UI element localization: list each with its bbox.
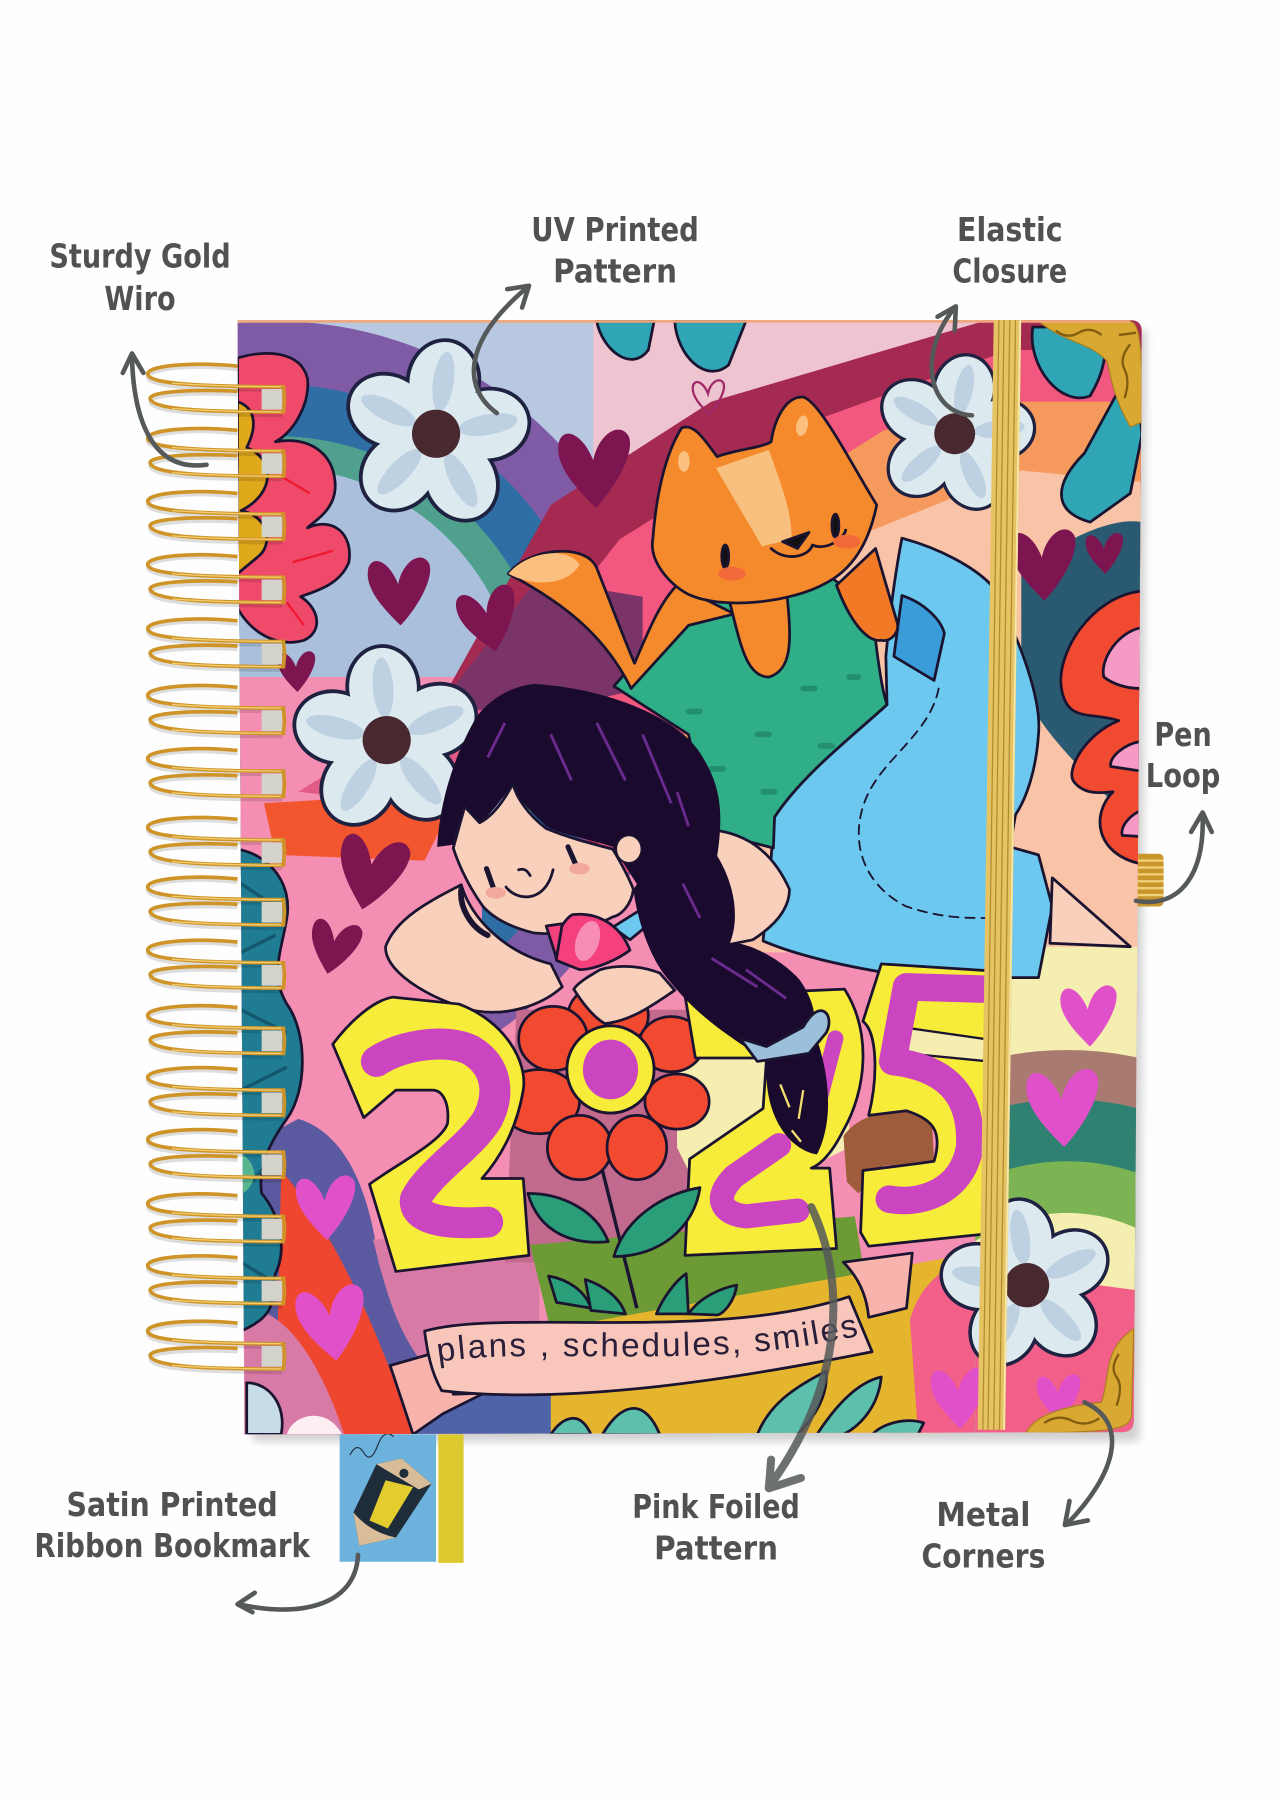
arrow: pen loop: [1136, 812, 1212, 902]
second numeral 2: [685, 989, 863, 1255]
banner: [388, 1252, 914, 1434]
label: Elastic Closure: Closure: [952, 251, 1067, 290]
elastic closure: [978, 320, 1021, 1430]
girl's face: [453, 784, 641, 935]
gold wire spiral: [148, 364, 285, 1372]
teal bottom leaves: [551, 1371, 924, 1434]
metal corner bottom right: [1026, 1329, 1134, 1433]
red flower as zero: [499, 983, 709, 1308]
right red flower: [1061, 591, 1142, 864]
girl's braid: [633, 855, 828, 1154]
flower 3: [880, 353, 1036, 511]
girl's hand: [574, 966, 675, 1024]
girl's front arm: [386, 885, 562, 1012]
right edge painted splash: [1021, 521, 1142, 826]
top right teal leaves: [597, 321, 1142, 522]
label: Sturdy Gold Wiro: Sturdy Gold: [49, 236, 231, 275]
flower leaves: [528, 1188, 737, 1315]
label: Elastic Closure: [952, 210, 1067, 290]
planner cover: [238, 320, 1142, 1434]
numeral 5: [861, 964, 989, 1246]
label: UV Printed Pattern: Pattern: [553, 251, 677, 290]
flower 4: [939, 1197, 1110, 1366]
label: Metal Corners: Metal: [936, 1495, 1030, 1534]
flower 2: [292, 644, 478, 827]
foot: [1050, 878, 1130, 947]
label: Pen Loop: Pen: [1154, 715, 1212, 754]
arrow: elastic closure: [932, 306, 972, 415]
arrow: sturdy gold wiro: [123, 353, 207, 465]
label: Metal Corners: [921, 1495, 1045, 1575]
label: Metal Corners: Corners: [921, 1536, 1045, 1575]
shoulder strap: [614, 910, 643, 942]
girl's jeans: [763, 538, 1052, 978]
ribbon bookmark: [340, 1434, 464, 1563]
book shadow: [244, 330, 1146, 1441]
banner text: plans , schedules, smiles: [438, 1320, 857, 1368]
numeral 2: [333, 997, 529, 1271]
arrow: UV printed pattern: [474, 286, 529, 413]
label: Satin Printed Ribbon Bookmark: [34, 1485, 311, 1565]
label: UV Printed Pattern: [531, 210, 699, 290]
label: Sturdy Gold Wiro: [49, 236, 231, 318]
hair tie bow: [740, 1011, 829, 1061]
girl's hair: [437, 684, 720, 893]
bottom-left pale flower: [247, 1383, 342, 1434]
cover background colour fields: [238, 320, 1142, 1434]
metal corner top right: [1038, 321, 1142, 427]
arrow: ribbon bookmark: [238, 1555, 358, 1612]
pen loop: [1134, 854, 1164, 907]
cat: [508, 397, 898, 688]
label: Satin Printed Ribbon Bookmark: Ribbon Bookmark: [34, 1526, 311, 1565]
label: UV Printed Pattern: UV Printed: [531, 210, 699, 249]
butterfly: [546, 914, 630, 970]
label: Pink Foiled Pattern: Pattern: [654, 1528, 778, 1567]
label: Pink Foiled Pattern: Pink Foiled: [632, 1487, 800, 1526]
label: Pen Loop: Loop: [1146, 756, 1220, 795]
left red leaves: [238, 353, 349, 642]
pink foil hearts: [294, 985, 1117, 1429]
top edge highlight: [238, 320, 1130, 323]
arrow: metal corners: [1065, 1402, 1112, 1525]
outline heart: [693, 380, 724, 414]
label: Satin Printed Ribbon Bookmark: Satin Printed: [67, 1485, 278, 1524]
label: Elastic Closure: Elastic: [957, 210, 1063, 249]
left teal leaves: [238, 849, 302, 1331]
label: Sturdy Gold Wiro: Wiro: [104, 279, 176, 318]
girl's green shirt: [614, 574, 887, 848]
label: Pink Foiled Pattern: [632, 1487, 800, 1567]
arrow: pink foiled pattern: [769, 1207, 833, 1488]
flower 1: [346, 338, 532, 522]
label: Pen Loop: [1146, 715, 1220, 795]
maroon hearts: [278, 430, 1123, 980]
girl's back arm: [717, 830, 791, 944]
